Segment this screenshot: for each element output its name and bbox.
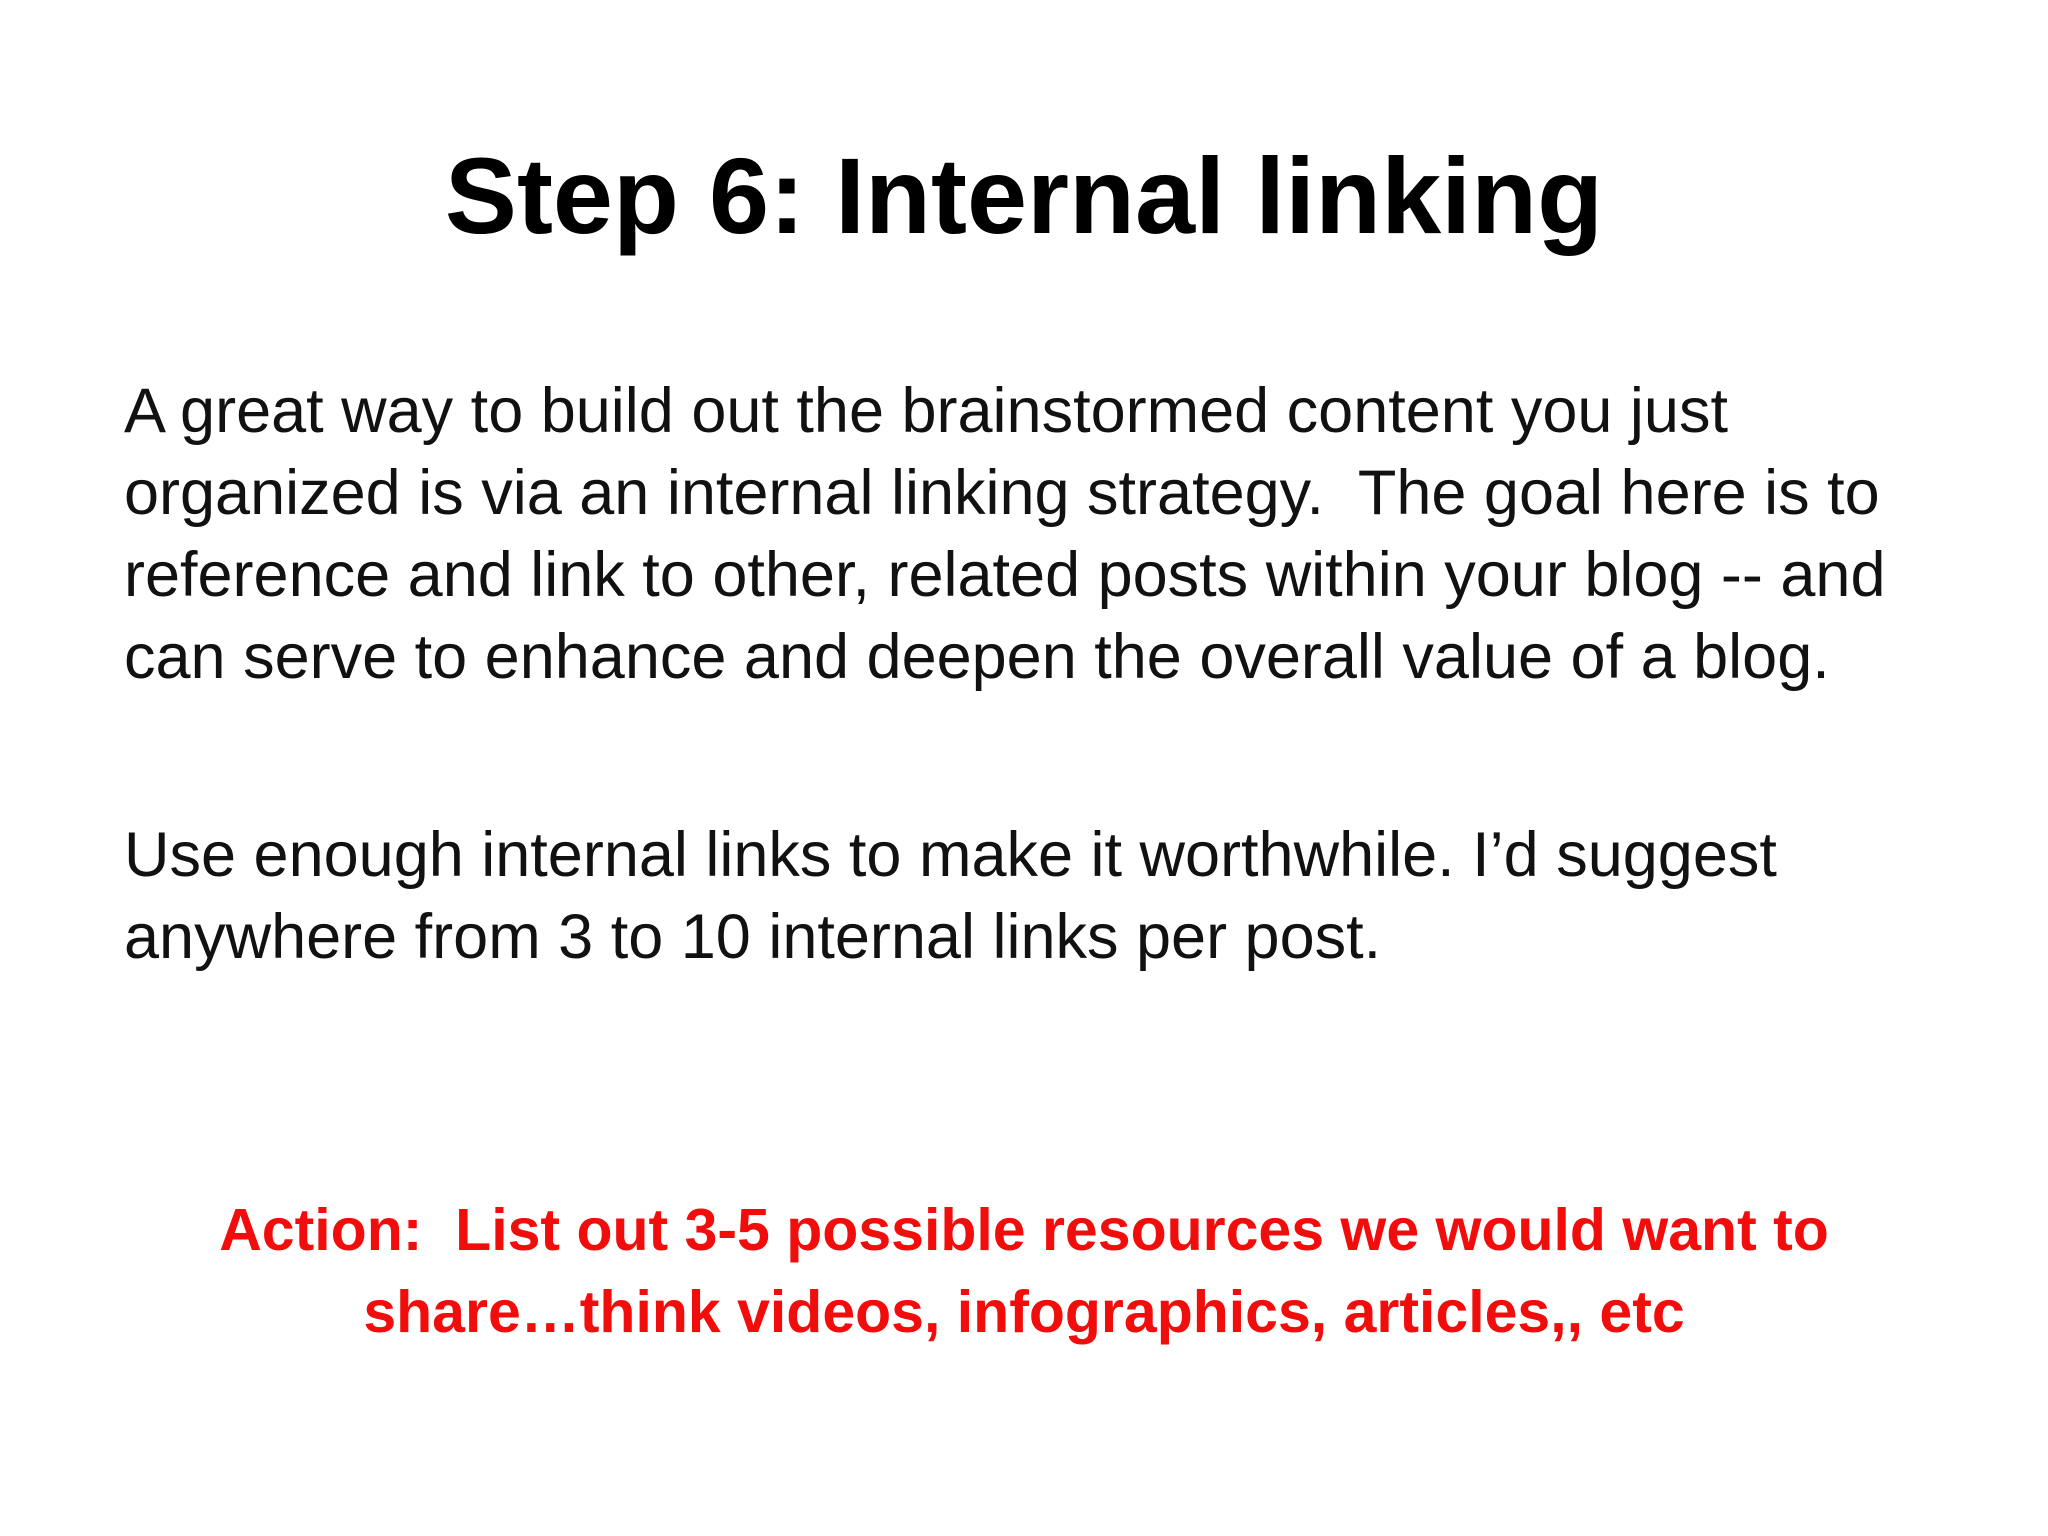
text block: paragraph 1: A great way to build out the brainstormed content you just: [124, 376, 1728, 446]
text block: paragraph 2: Use enough internal links to make it worthwhile. I’d suggest: [124, 820, 1777, 890]
title: Step 6: Internal linking: [445, 135, 1603, 256]
callout: action: [219, 1197, 1829, 1345]
text block: paragraph 2: anywhere from 3 to 10 internal links per post.: [124, 902, 1381, 972]
text block: paragraph 1: organized is via an internal linking strategy. The goal here is to: [124, 458, 1880, 528]
text block: paragraph 1: [124, 376, 1886, 692]
callout: action: Action: List out 3-5 possible resources we would want to: [219, 1197, 1829, 1263]
text block: paragraph 2: [124, 820, 1777, 972]
text block: paragraph 1: can serve to enhance and deepen the overall value of a blog.: [124, 622, 1830, 692]
text block: paragraph 1: reference and link to other, related posts within your blog -- and: [124, 540, 1886, 610]
callout: action: share…think videos, infographics, articles,, etc: [363, 1279, 1685, 1345]
